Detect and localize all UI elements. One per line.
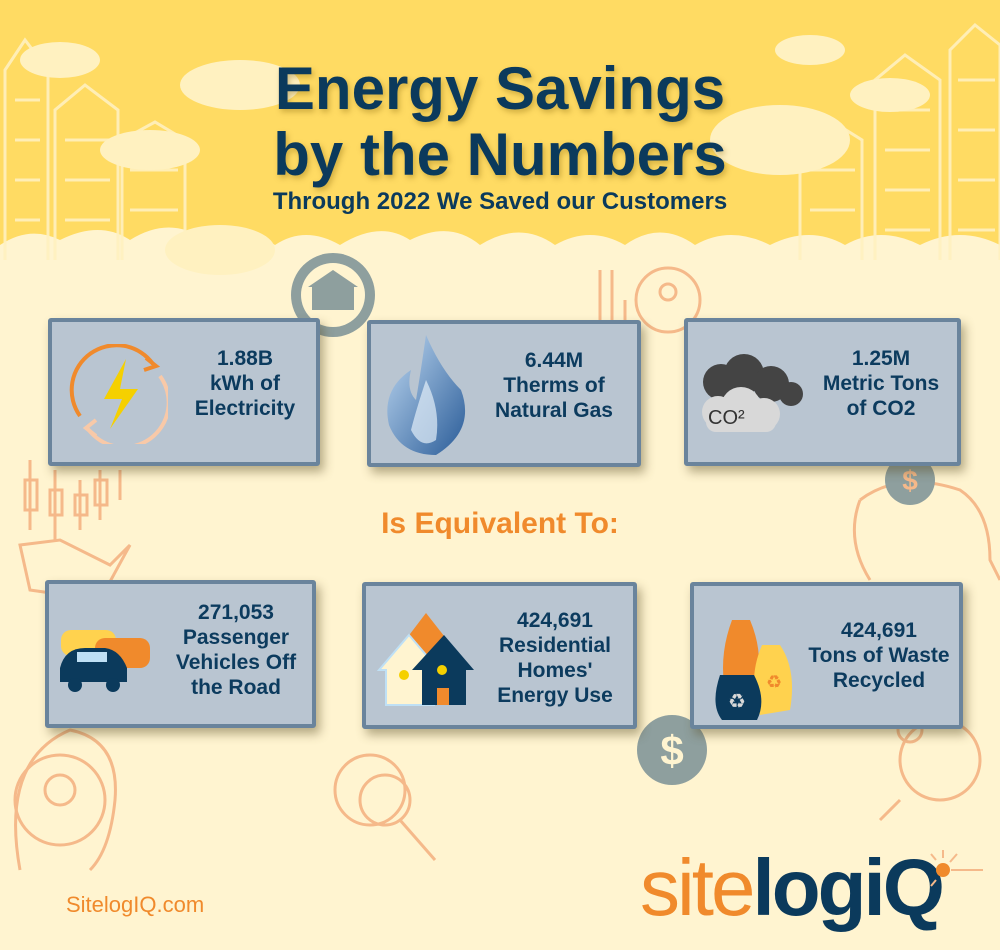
text: Therms of xyxy=(503,374,605,397)
text xyxy=(808,619,950,692)
text: the Road xyxy=(191,676,281,699)
card: homes xyxy=(362,582,637,729)
text: 271,053 xyxy=(198,601,274,624)
text: 424,691 xyxy=(517,609,593,632)
icon: lightning cycle xyxy=(70,344,168,444)
text xyxy=(823,347,939,420)
text: Energy Use xyxy=(497,684,613,707)
text: 424,691 xyxy=(841,619,917,642)
heading: is equivalent to: Is Equivalent To: xyxy=(381,507,619,540)
title: by the Numbers xyxy=(273,121,727,188)
text: Recycled xyxy=(833,669,925,692)
text: Homes' xyxy=(517,659,593,682)
icon: recycle bags xyxy=(715,620,792,720)
background: sky and decorations: $ xyxy=(902,465,918,496)
background: sky and decorations: $ xyxy=(660,727,684,774)
text: Metric Tons xyxy=(823,372,939,395)
text xyxy=(495,349,613,422)
icon: flame xyxy=(387,336,466,455)
text xyxy=(497,609,613,707)
icon: recycle bags: ♻ xyxy=(766,672,782,692)
text: Vehicles Off xyxy=(176,651,296,674)
logo xyxy=(640,843,983,932)
text: Residential xyxy=(499,634,611,657)
text: Tons of Waste xyxy=(808,644,950,667)
card: electricity xyxy=(48,318,320,466)
text: 1.88B xyxy=(217,347,273,370)
text: Natural Gas xyxy=(495,399,613,422)
text xyxy=(176,601,296,699)
text: Passenger xyxy=(183,626,289,649)
icon: CO2 clouds xyxy=(702,354,803,432)
card: vehicles xyxy=(45,580,316,728)
text xyxy=(195,347,295,420)
title: Energy Savings xyxy=(275,55,725,122)
icon: houses xyxy=(377,613,474,706)
icon: CO2 clouds: CO² xyxy=(708,407,745,429)
card: CO2 xyxy=(684,318,961,466)
title xyxy=(273,55,728,193)
icon: cars xyxy=(60,630,150,692)
card: waste xyxy=(690,582,963,729)
icon: sun xyxy=(930,850,983,887)
icon: recycle bags: ♻ xyxy=(728,691,746,713)
footer url: SitelogIQ.com xyxy=(66,892,204,917)
text: 6.44M xyxy=(525,349,583,372)
subtitle: Through 2022 We Saved our Customers xyxy=(273,188,727,215)
logo text: sitelogiQ xyxy=(640,843,942,932)
text: kWh of xyxy=(210,372,280,395)
text: of CO2 xyxy=(847,397,915,420)
text: Electricity xyxy=(195,397,295,420)
card: natural gas xyxy=(367,320,641,467)
text: 1.25M xyxy=(852,347,910,370)
